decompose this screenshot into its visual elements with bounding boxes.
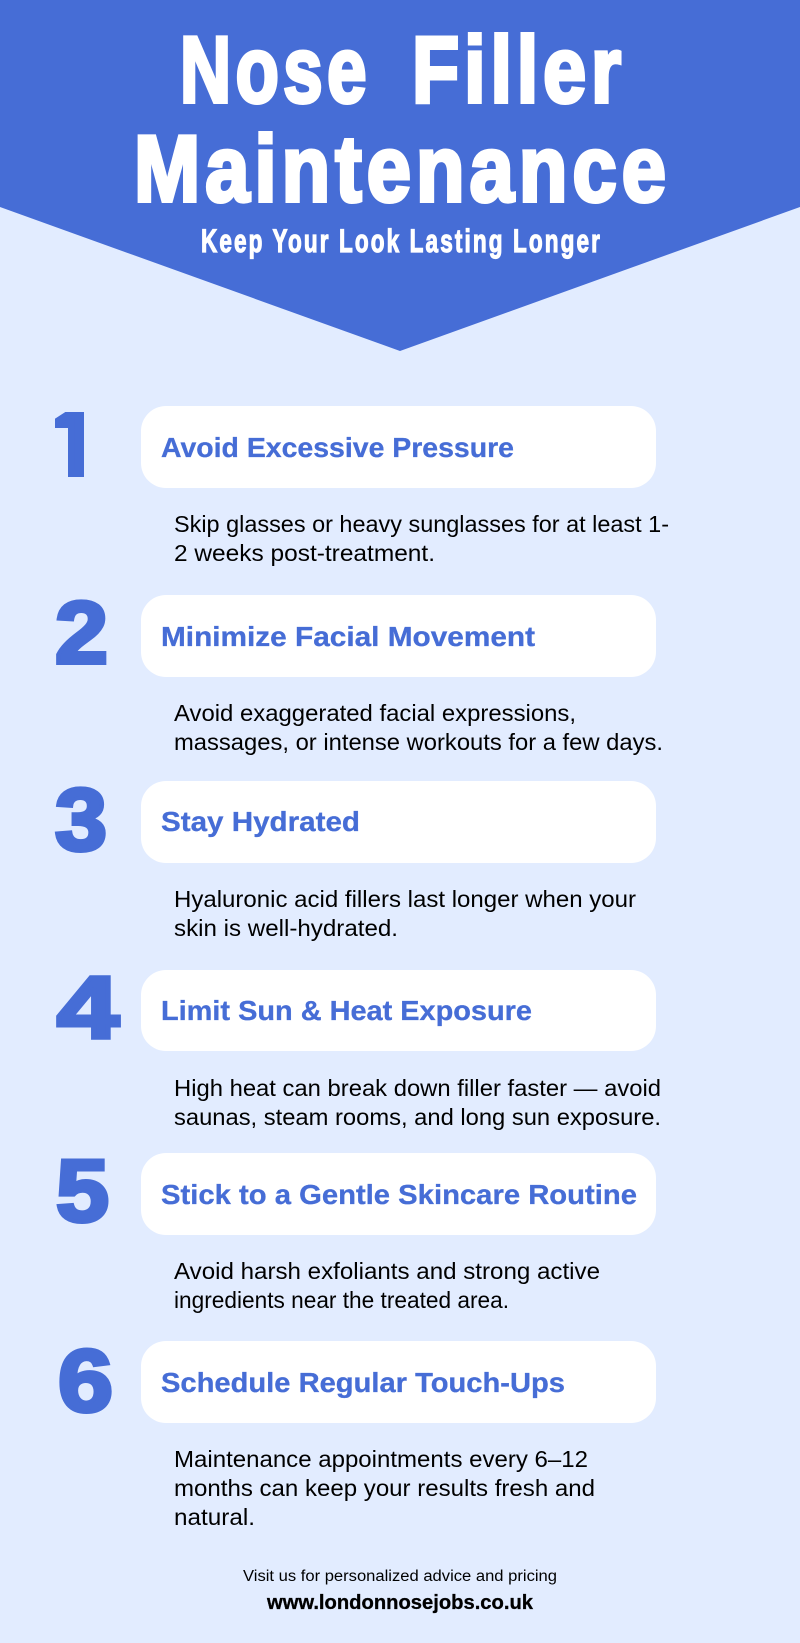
- title: Filler: [412, 17, 626, 122]
- website url: www.londonnosejobs.co.uk: [266, 1592, 534, 1614]
- number 1: 1: [50, 393, 101, 495]
- card: step 4 heading: Limit Sun & Heat Exposure: [161, 995, 532, 1026]
- title: Nose: [180, 17, 371, 122]
- step 2 description: massages, or intense workouts for a few days.: [174, 729, 663, 755]
- step 4 description: [174, 1075, 661, 1130]
- step 3 description: [174, 886, 636, 941]
- step 4 description: saunas, steam rooms, and long sun exposure.: [174, 1104, 661, 1130]
- step 3 description: Hyaluronic acid fillers last longer when your: [174, 886, 636, 912]
- title: [134, 17, 671, 221]
- number 4: 4: [57, 958, 119, 1057]
- step 4: [57, 958, 661, 1130]
- step 1: [50, 393, 669, 566]
- number 6: 6: [58, 1331, 113, 1430]
- footer: [243, 1568, 557, 1614]
- step 1 description: Skip glasses or heavy sunglasses for at least 1-: [174, 511, 669, 537]
- step 6 description: [174, 1446, 595, 1530]
- card: step 2 heading: [141, 595, 656, 677]
- number 2: 2: [55, 583, 108, 682]
- step 5: [56, 1141, 656, 1313]
- step 6 description: months can keep your results fresh and: [174, 1475, 595, 1501]
- card: step 3 heading: [141, 781, 656, 863]
- card: step 6 heading: Schedule Regular Touch-Ups: [161, 1367, 565, 1398]
- step 2: [55, 583, 663, 755]
- step 2 description: [174, 700, 663, 755]
- step 3 description: skin is well-hydrated.: [174, 915, 398, 941]
- number 3: 3: [55, 770, 107, 869]
- step 1 description: [174, 511, 669, 566]
- step 5 description: Avoid harsh exfoliants and strong active: [174, 1258, 600, 1284]
- step 6 description: Maintenance appointments every 6–12: [174, 1446, 588, 1472]
- number 5: 5: [56, 1141, 109, 1240]
- subtitle: Keep Your Look Lasting Longer: [201, 223, 602, 259]
- card: step 1 heading: Avoid Excessive Pressure: [161, 432, 514, 463]
- card: step 6 heading: [141, 1341, 656, 1423]
- card: step 5 heading: [141, 1153, 656, 1235]
- step 4 description: High heat can break down filler faster — avoid: [174, 1075, 661, 1101]
- card: step 2 heading: Minimize Facial Movement: [161, 621, 535, 652]
- title: Maintenance: [134, 116, 671, 221]
- step 2 description: Avoid exaggerated facial expressions,: [174, 700, 576, 726]
- footer note: Visit us for personalized advice and pricing: [243, 1568, 557, 1585]
- step 1 description: 2 weeks post-treatment.: [174, 540, 435, 566]
- step 5 description: [174, 1258, 600, 1313]
- step 6: [58, 1331, 656, 1530]
- header banner: [0, 0, 800, 351]
- step 5 description: ingredients near the treated area.: [174, 1287, 509, 1313]
- step 3: [55, 770, 656, 941]
- card: step 1 heading: [141, 406, 656, 488]
- card: step 4 heading: [141, 970, 656, 1051]
- card: step 3 heading: Stay Hydrated: [161, 806, 360, 837]
- card: step 5 heading: Stick to a Gentle Skincare Routine: [161, 1179, 637, 1210]
- step 6 description: natural.: [174, 1504, 255, 1530]
